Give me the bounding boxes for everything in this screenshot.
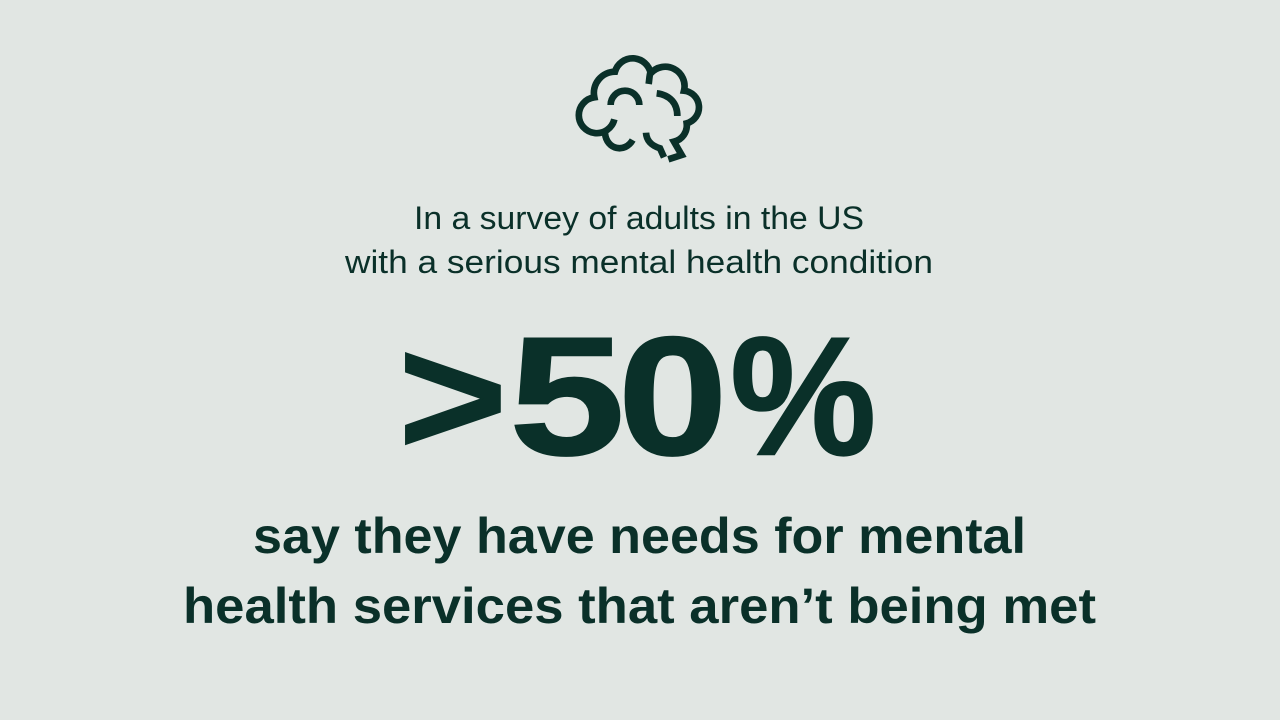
conclusion text: health services that aren’t being met: [183, 578, 1096, 634]
big statistic: >: [398, 301, 508, 490]
intro text: with a serious mental health condition: [344, 244, 933, 280]
conclusion text: [183, 508, 1096, 634]
intro text: [344, 200, 933, 280]
big statistic: [398, 301, 876, 491]
big statistic: 0: [618, 301, 728, 490]
big statistic: %: [730, 303, 876, 491]
conclusion text: say they have needs for mental: [253, 508, 1026, 564]
big statistic: 5: [509, 302, 625, 491]
intro text: In a survey of adults in the US: [414, 200, 864, 236]
icon: brain: [579, 58, 699, 159]
